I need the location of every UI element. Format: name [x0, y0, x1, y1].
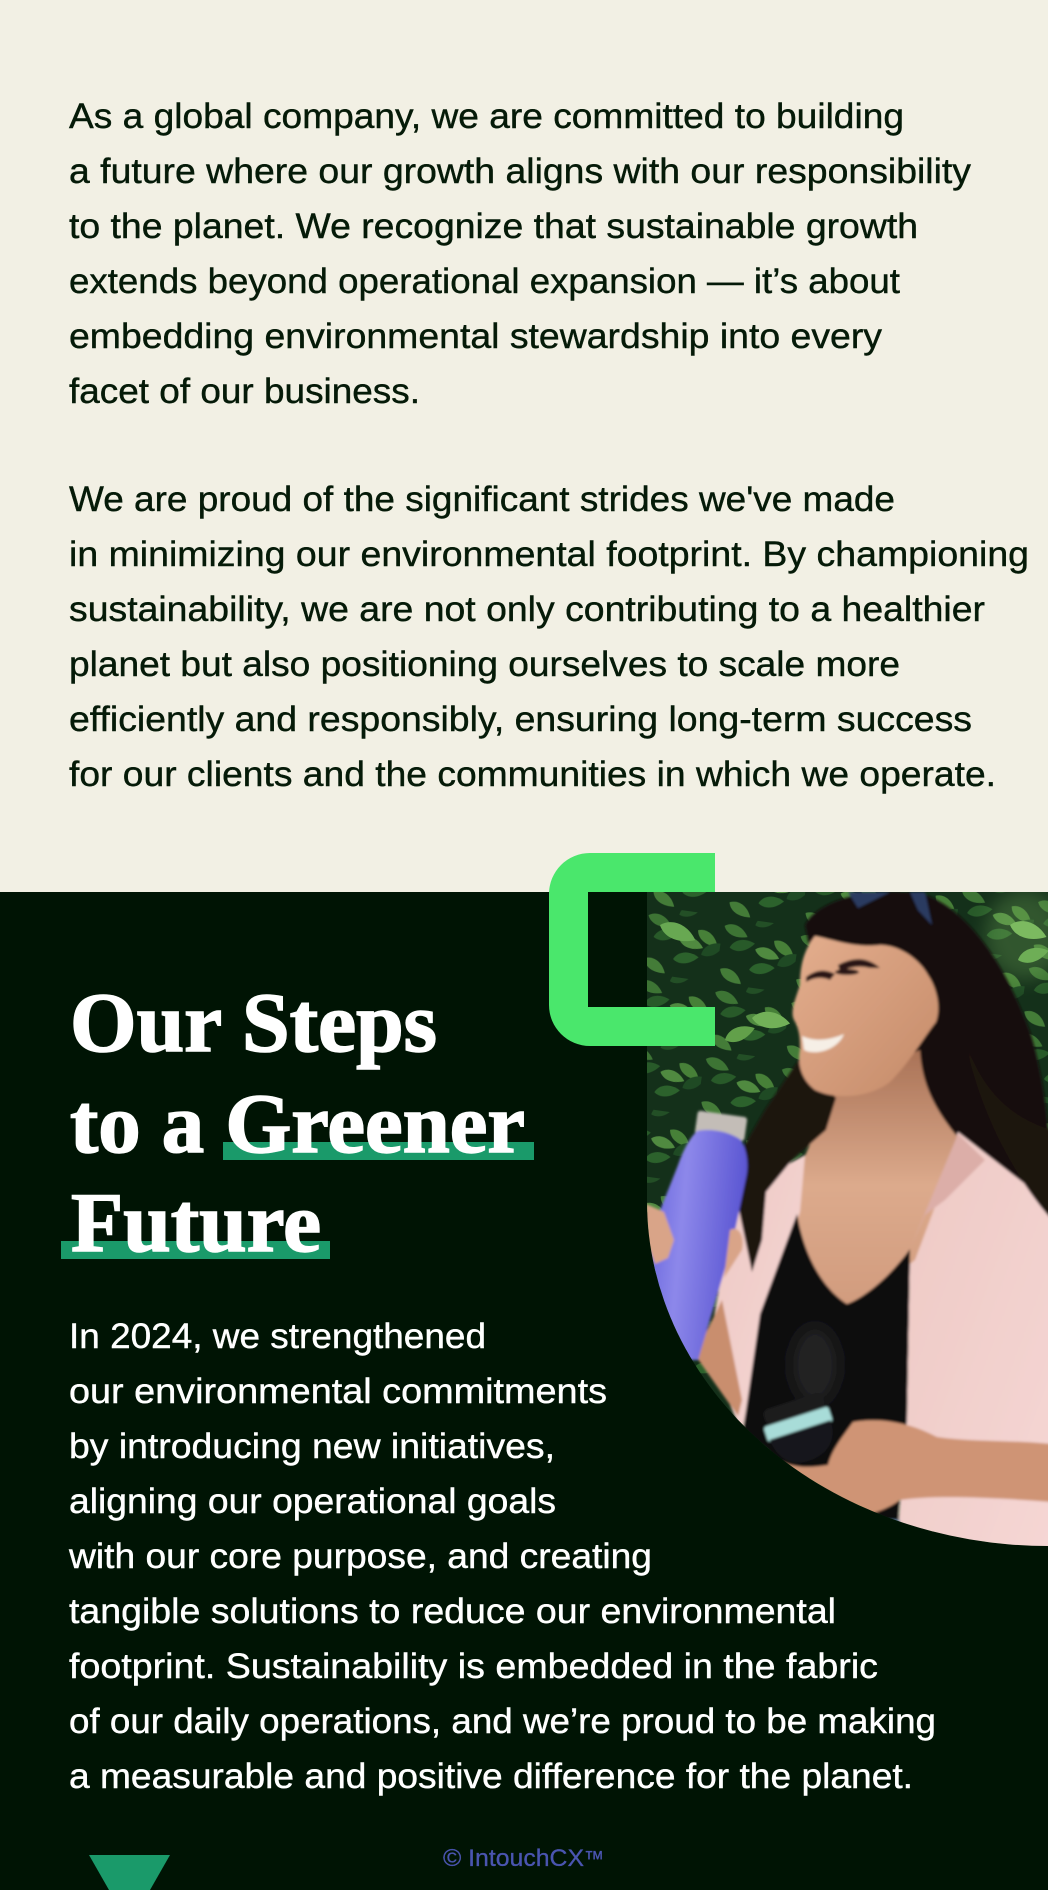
- text block: 2024 commitments: by introducing new initiatives,: [69, 1427, 555, 1466]
- sunglasses on head: [848, 892, 932, 925]
- text block: 2024 commitments: with our core purpose, and creating: [68, 1537, 652, 1576]
- jeans glimpse: [888, 1517, 902, 1522]
- text block: 2024 commitments: aligning our operational goals: [69, 1482, 556, 1521]
- paragraph: global commitment: embedding environmental stewardship into every: [69, 317, 883, 356]
- text block: 2024 commitments: tangible solutions to reduce our environmental: [69, 1592, 836, 1631]
- bottle lid: [762, 1398, 835, 1464]
- paragraph: global commitment: facet of our business.: [69, 372, 420, 411]
- paragraph: environmental footprint: in minimizing our environmental footprint. By championing: [69, 535, 1029, 574]
- footer: copyright: © IntouchCX: [443, 1845, 584, 1872]
- hand and forearm holding lid: [780, 1420, 1048, 1517]
- smile: [802, 1034, 844, 1052]
- highlight on top: [791, 1325, 839, 1405]
- heading text: Our Steps: [70, 976, 437, 1070]
- paragraph: environmental footprint: for our clients and the communities in which we operate.: [69, 755, 996, 794]
- hand gripping bottle: [646, 1204, 674, 1264]
- water bottle: [640, 1110, 747, 1360]
- text block: 2024 commitments: footprint. Sustainability is embedded in the fabric: [69, 1647, 878, 1686]
- right shirt panel: [896, 1132, 1048, 1552]
- icon: green bracket logo shape: [549, 853, 715, 1046]
- paragraph: global commitment: a future where our growth aligns with our responsibility: [69, 152, 972, 191]
- heading text: to a Greener: [70, 1077, 525, 1171]
- person: [640, 892, 1048, 1552]
- heading text: [70, 976, 525, 1270]
- text block: 2024 commitments: our environmental commitments: [69, 1372, 607, 1411]
- panel: introduction text: [69, 97, 1029, 794]
- hair: left cascade: [733, 1058, 836, 1272]
- paragraph: environmental footprint: sustainability, we are not only contributing to a healthier: [69, 590, 985, 629]
- paragraph: environmental footprint: We are proud of the significant strides we've made: [69, 480, 895, 519]
- text block: 2024 commitments: a measurable and positive difference for the planet.: [69, 1757, 913, 1796]
- paragraph: environmental footprint: efficiently and responsibly, ensuring long-term success: [69, 700, 972, 739]
- text block: 2024 commitments: of our daily operations, and we’re proud to be making: [69, 1702, 936, 1741]
- face: [793, 936, 938, 1096]
- paragraph: global commitment: [69, 97, 972, 411]
- heading: Our Steps to a Greener Future: [61, 976, 534, 1270]
- collar shading: [924, 1134, 985, 1216]
- footer: copyright: ™: [584, 1846, 604, 1871]
- paragraph: global commitment: extends beyond operational expansion — it’s about: [69, 262, 900, 301]
- text block: 2024 commitments: In 2024, we strengthened: [69, 1317, 486, 1356]
- black top: [743, 1214, 910, 1528]
- paragraph: global commitment: to the planet. We recognize that sustainable growth: [69, 207, 918, 246]
- eyes and brows: [806, 959, 880, 982]
- icon: green triangle marker: [89, 1855, 170, 1890]
- fingers behind bottle: [724, 1229, 743, 1278]
- underline: Greener: [223, 1142, 534, 1160]
- lower arm: [695, 1300, 742, 1416]
- hair strands over collar: [970, 1056, 1048, 1218]
- photo: woman holding a purple water bottle: [640, 890, 1048, 1552]
- underline: Future: [61, 1241, 330, 1259]
- skin: neck and chest: [790, 1050, 960, 1320]
- paragraph: environmental footprint: planet but also positioning ourselves to scale more: [69, 645, 900, 684]
- page background: [0, 0, 1048, 892]
- left shirt panel: [713, 1155, 805, 1434]
- paragraph: global commitment: As a global company, we are committed to building: [69, 97, 904, 136]
- foliage background: [647, 890, 1048, 1552]
- heading text: Future: [71, 1176, 321, 1270]
- hair: back mass: [804, 892, 1048, 1183]
- paragraph: environmental footprint: [69, 480, 1029, 794]
- text block: 2024 commitments: [68, 1317, 936, 1796]
- panel: dark green section: [0, 892, 1048, 1890]
